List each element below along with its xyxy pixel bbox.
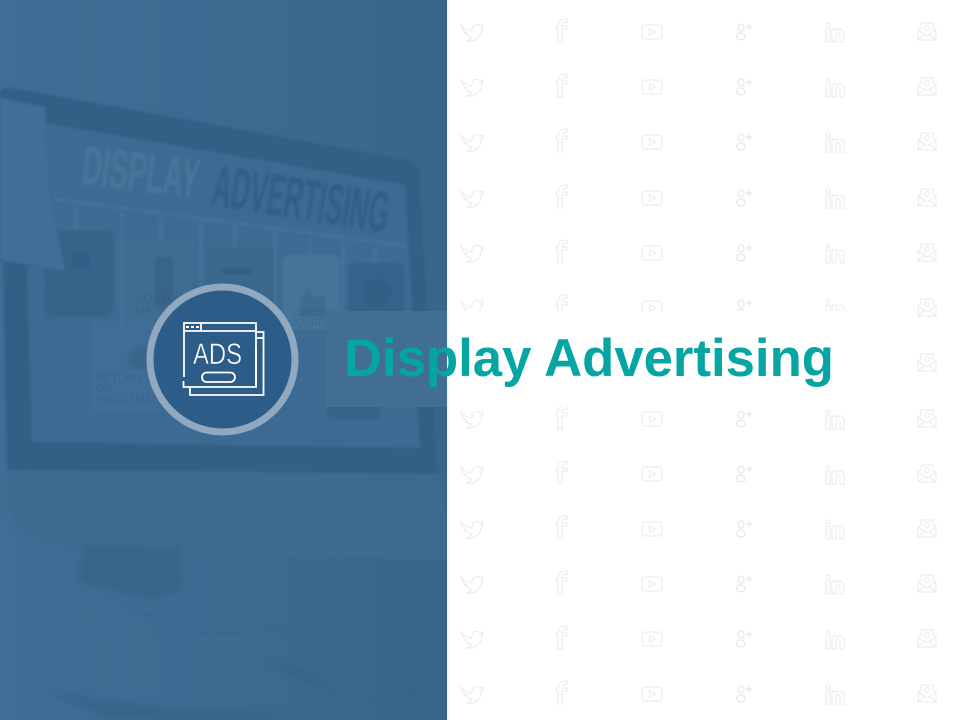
- icon front window: [184, 323, 256, 387]
- screen banner text: DISPLAY: [79, 133, 203, 210]
- panel: tinted photo of monitor: ADVERTISING: [208, 154, 394, 246]
- monitor chin: [8, 470, 447, 560]
- screen card labels: MATRIX: [136, 305, 177, 317]
- background pattern: social media icons: [461, 19, 936, 704]
- sticky note: [0, 98, 65, 271]
- screen card labels: INVESTMENT: [96, 393, 167, 405]
- icon button: [202, 372, 235, 382]
- screen card labels: CONTENT: [136, 293, 189, 305]
- icon: ads browser window in circle: [150, 287, 295, 432]
- screen card labels: [97, 309, 334, 402]
- icon back window: [190, 332, 264, 395]
- desk shadows: [109, 710, 120, 712]
- monitor stand: [84, 550, 173, 594]
- screen cards: [44, 230, 404, 420]
- screen card labels: ON: [96, 383, 113, 395]
- panel: title background on photo: [326, 311, 447, 407]
- screen banner text: [82, 147, 388, 231]
- panel: tinted photo of monitor: [0, 0, 447, 720]
- icon dots: [186, 326, 199, 328]
- screen card labels: RETURN: [96, 373, 142, 385]
- icon ring: [150, 287, 295, 432]
- screen card labels: DIGITAL: [46, 278, 88, 290]
- monitor screen: [27, 123, 420, 448]
- screen card labels: JOURNEY: [291, 318, 339, 329]
- screen card labels: MEDIA: [46, 289, 82, 301]
- monitor bezel: [0, 88, 437, 473]
- icon ADS label: ADS: [193, 338, 242, 371]
- screen card labels: MARKETING: [46, 300, 111, 312]
- title: Display Advertising: [344, 329, 834, 388]
- white band behind title covering the pattern: [447, 311, 905, 407]
- screen card labels: CUSTOM: [291, 308, 334, 319]
- faint divider edge: [447, 0, 448, 720]
- screen shelf line and hangers: [55, 199, 407, 330]
